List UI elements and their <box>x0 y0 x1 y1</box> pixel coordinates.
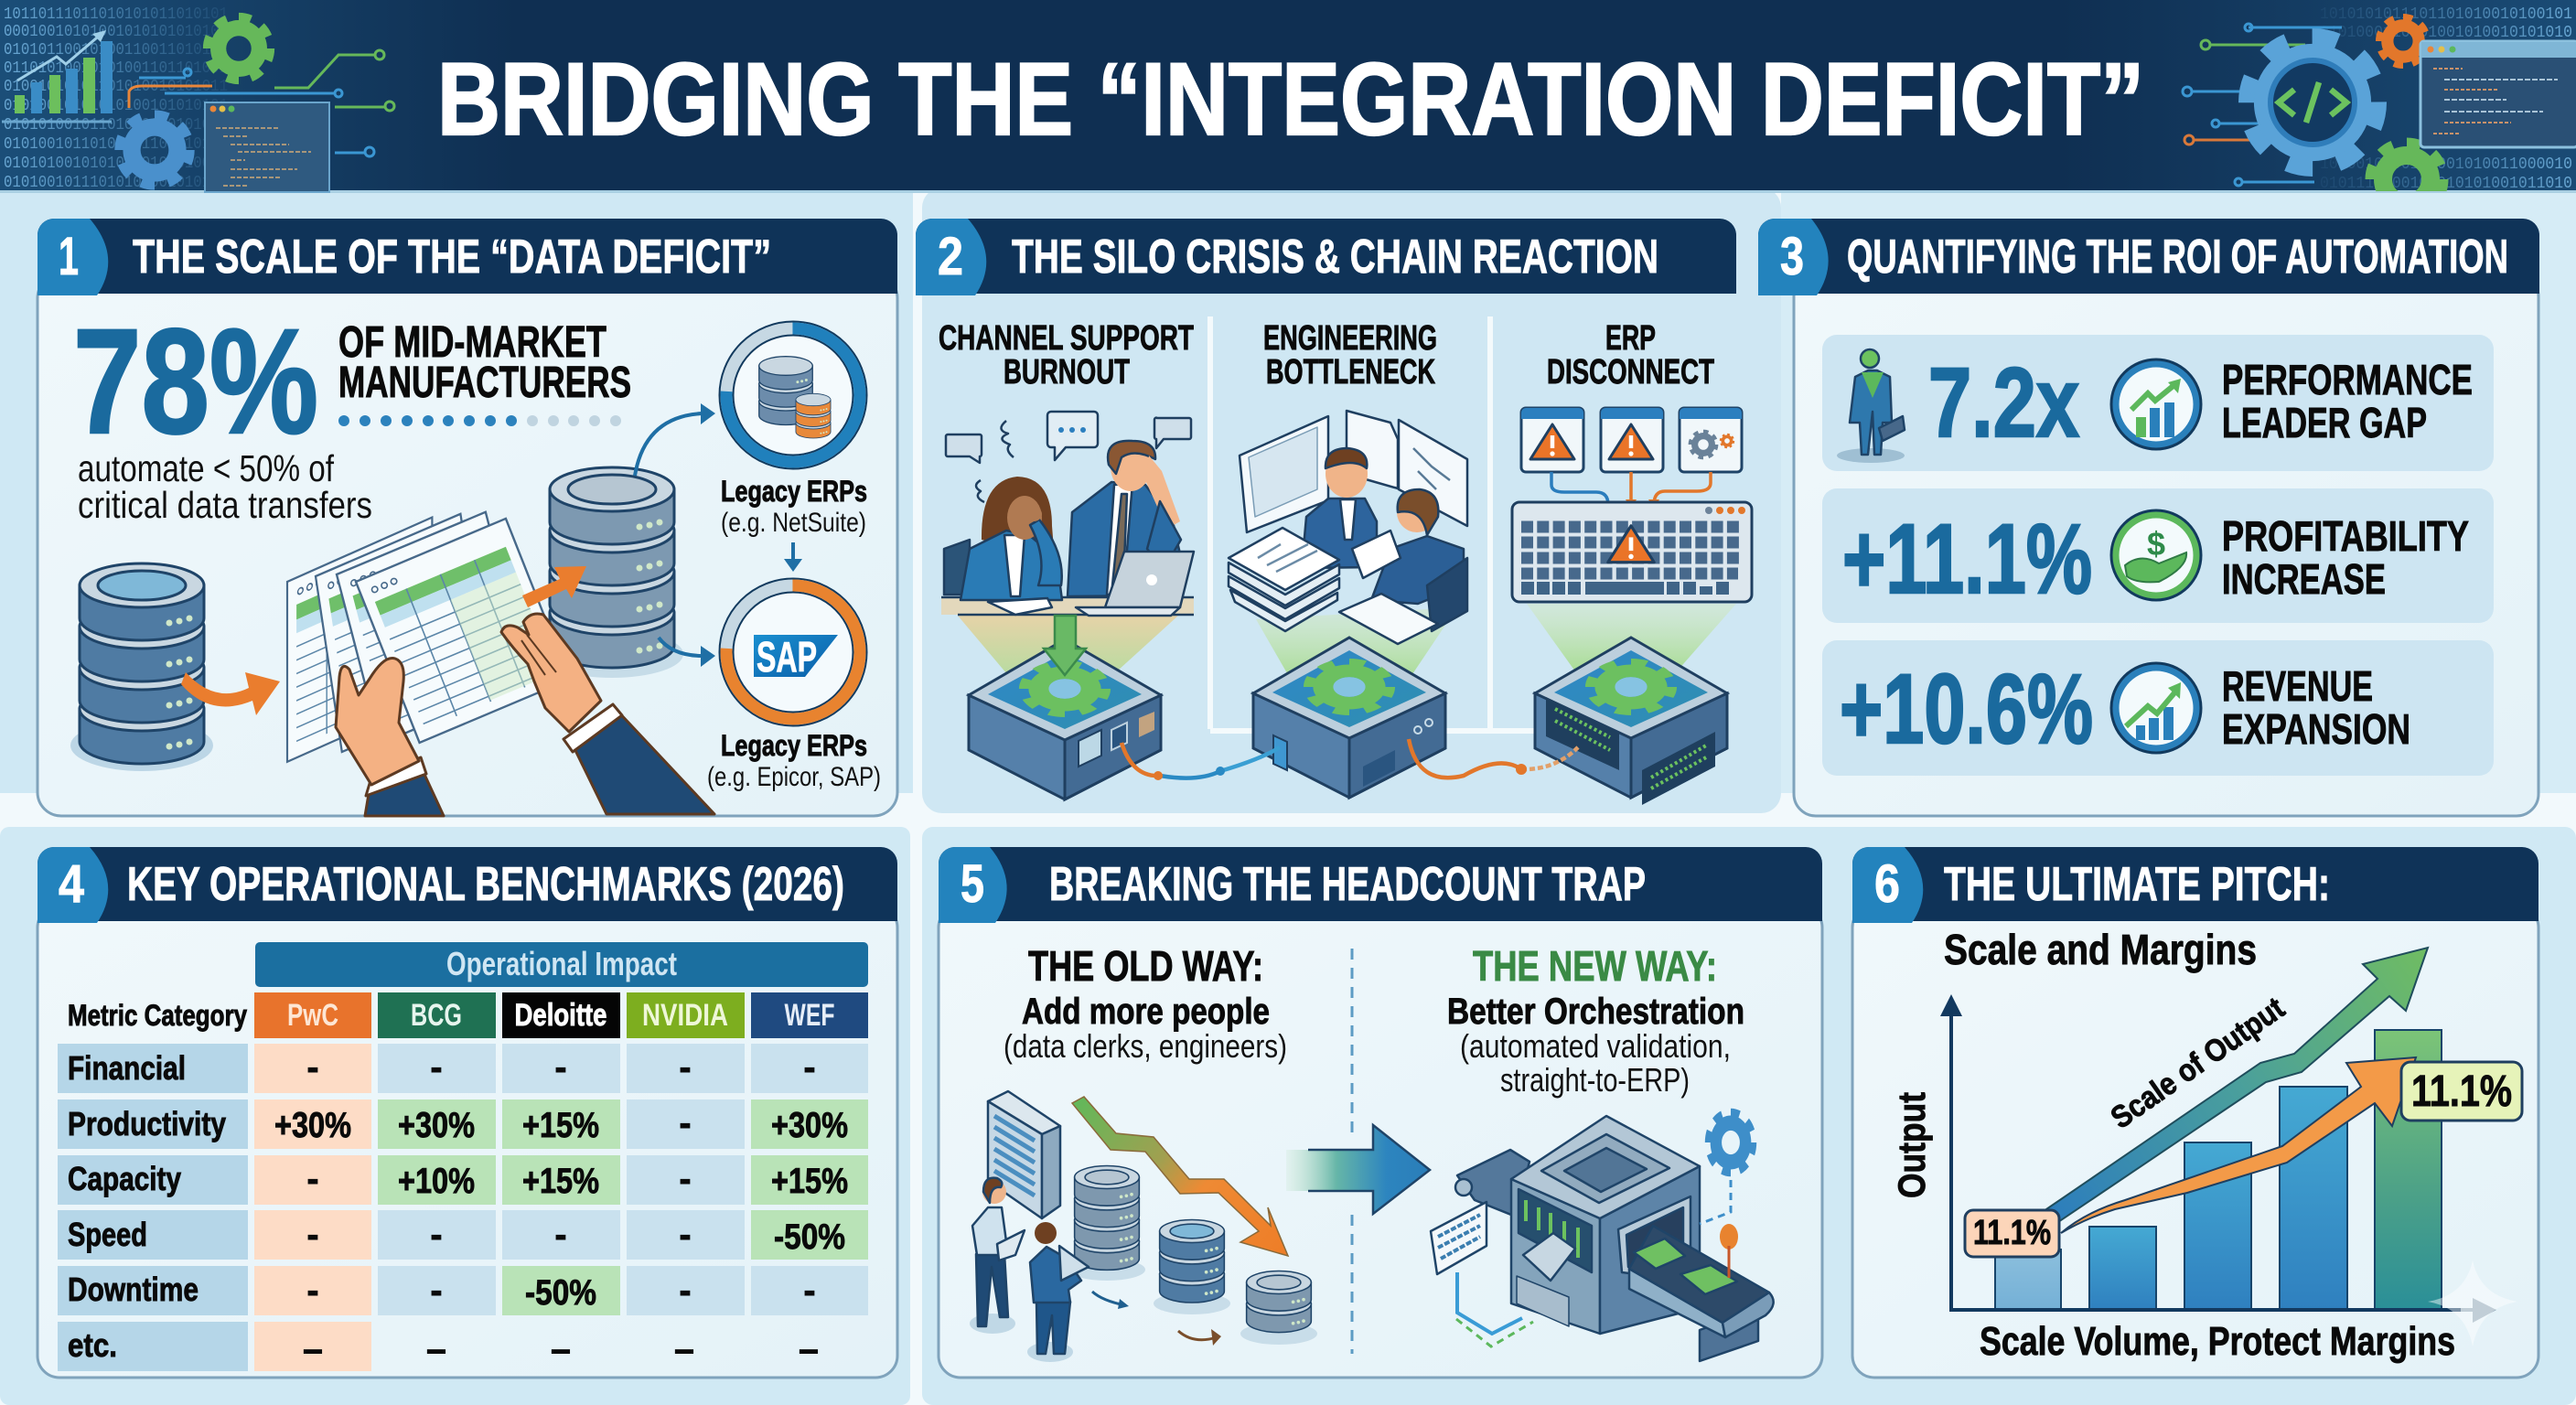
dot scale <box>338 415 621 426</box>
table values: - <box>430 1271 443 1311</box>
panel 5 heading: 5 <box>961 854 984 914</box>
stat: 7.2x: 7.2x <box>1928 347 2079 457</box>
table values: +30% <box>398 1106 475 1145</box>
arrow: chain cable <box>1122 739 1578 780</box>
chart: scale and margins <box>1890 948 2522 1364</box>
icon: money hand: $ <box>2147 525 2165 563</box>
panel 3: quantifying roi <box>1758 219 2539 816</box>
binary pattern left <box>4 5 228 192</box>
table header bar <box>255 942 868 987</box>
stat: 78%: 78% <box>73 297 318 465</box>
table values: - <box>430 1048 443 1088</box>
table values: – <box>674 1330 694 1369</box>
arrow: green push into box <box>1044 616 1086 675</box>
table column heads: NVIDIA <box>642 998 728 1033</box>
icon: big code gear <box>2250 40 2375 165</box>
icon: money hand <box>2114 513 2198 597</box>
icon: source database <box>70 563 213 771</box>
panel 5 heading: BREAKING THE HEADCOUNT TRAP <box>1049 858 1646 911</box>
table column heads: BCG <box>411 998 462 1033</box>
arrow: db to spreadsheets <box>181 672 280 715</box>
icon: server box 3 <box>1535 638 1727 805</box>
arrow: declining zigzag <box>1072 1097 1288 1256</box>
table values: +30% <box>771 1106 848 1145</box>
text: of mid-market manufacturers: MANUFACTURERS <box>338 359 631 407</box>
icon: code window left <box>205 102 329 192</box>
panel 2 heading <box>916 219 1736 295</box>
text: of mid-market manufacturers <box>338 318 631 407</box>
row: profitability increase <box>1822 488 2494 623</box>
binary pattern left: 01101010010101001101101001 <box>4 59 228 78</box>
panel 1: the scale of the data deficit <box>38 219 897 816</box>
panel 4: benchmarks <box>38 847 897 1378</box>
panel 6 heading: THE ULTIMATE PITCH: <box>1944 858 2330 911</box>
callout: start 11.1% <box>1965 1210 2059 1257</box>
binary pattern left: 00010010101001010101010101 <box>4 23 228 41</box>
table values: - <box>430 1216 443 1255</box>
binary pattern right <box>2320 5 2572 193</box>
arrow: feedback loop <box>1456 1272 1533 1346</box>
table row backgrounds <box>58 1044 868 1371</box>
table values: -50% <box>774 1217 845 1257</box>
table values: - <box>803 1271 816 1311</box>
panel 4 heading: 4 <box>59 854 84 914</box>
stat: +11.1%: +11.1% <box>1842 503 2092 614</box>
text: the new way: straight-to-ERP) <box>1500 1061 1690 1099</box>
table column heads <box>254 992 868 1038</box>
text: the old way <box>1004 942 1287 1065</box>
panel 3 heading: 3 <box>1780 227 1804 286</box>
table values: - <box>554 1048 567 1088</box>
label: legacy erps netsuite: (e.g. NetSuite) <box>721 508 866 538</box>
table values: - <box>307 1160 318 1199</box>
arrow: db to netsuite <box>635 403 715 476</box>
label: legacy erps sap: (e.g. Epicor, SAP) <box>707 762 881 792</box>
text: the old way: (data clerks, engineers) <box>1004 1027 1287 1065</box>
label: revenue expansion <box>2222 662 2410 753</box>
icon: circuit lines right <box>2183 24 2342 186</box>
table values: - <box>307 1048 318 1088</box>
icon: circuit lines left <box>129 50 394 156</box>
icon: code window right <box>2420 41 2576 147</box>
label: metric category: Metric Category <box>68 999 247 1032</box>
label: profitability increase: INCREASE <box>2222 555 2386 603</box>
table values: +15% <box>771 1162 848 1201</box>
table values: - <box>554 1216 567 1255</box>
table values: - <box>307 1216 318 1255</box>
subtitle: scale and margins: Scale and Margins <box>1944 926 2257 973</box>
woman <box>982 477 1054 549</box>
icon: sap ring <box>726 585 860 719</box>
icon: blue gear and pin <box>1700 1114 1753 1278</box>
arrow: spreadsheets to db <box>522 566 586 607</box>
icon: workers <box>970 1178 1089 1362</box>
label: profitability increase <box>2222 512 2469 603</box>
label: scale of output: Scale of Output <box>2105 991 2291 1136</box>
keyboard <box>1512 502 1752 602</box>
icon: target database <box>541 467 683 678</box>
table values: - <box>307 1271 318 1311</box>
icon: leader person <box>1837 349 1905 463</box>
icon: growth chart <box>2114 362 2198 446</box>
label: engineering bottleneck: ENGINEERING <box>1263 319 1437 358</box>
row labels: Financial <box>68 1049 186 1087</box>
row labels: Productivity <box>68 1105 226 1142</box>
label: performance leader gap: PERFORMANCE <box>2222 356 2473 403</box>
arrow: old to new <box>1286 1125 1430 1214</box>
icon: sparkle <box>2428 1260 2517 1346</box>
table values: - <box>679 1104 692 1143</box>
table values: - <box>679 1160 692 1199</box>
panel 1 heading <box>38 219 897 295</box>
label: performance leader gap: LEADER GAP <box>2222 399 2427 446</box>
binary pattern left: 10110111011010101011010101 <box>4 5 228 24</box>
row labels: Capacity <box>68 1160 181 1197</box>
row labels: Downtime <box>68 1271 199 1308</box>
icon: orange gear <box>2380 18 2426 64</box>
binary pattern left: 01010010110101001101010101 <box>4 135 228 154</box>
binary pattern left: 01010010111010101001010101 <box>4 174 228 192</box>
arrow: scale of output <box>2046 948 2428 1222</box>
table values: – <box>551 1330 571 1369</box>
label: channel support burnout: CHANNEL SUPPORT <box>939 319 1194 358</box>
table values <box>274 1048 848 1369</box>
axes <box>1940 994 2496 1323</box>
axis label: scale volume: Scale Volume, Protect Margins <box>1980 1319 2455 1364</box>
label: legacy erps sap <box>707 729 881 792</box>
callout: start 11.1%: 11.1% <box>1973 1214 2051 1252</box>
arrow: margins <box>2061 1057 2416 1233</box>
label: revenue expansion: EXPANSION <box>2222 705 2410 753</box>
row labels <box>68 1049 226 1364</box>
text: the new way: (automated validation, <box>1460 1027 1731 1065</box>
table values: - <box>679 1271 692 1311</box>
header banner <box>0 0 2576 214</box>
table: benchmarks <box>58 942 868 1371</box>
panel 6 heading <box>1852 847 2538 923</box>
table values: +15% <box>522 1106 599 1145</box>
icon: server box 1 <box>969 639 1161 799</box>
label: profitability increase: PROFITABILITY <box>2222 512 2469 560</box>
bubbles <box>1047 412 1098 460</box>
label: legacy erps netsuite <box>721 475 867 538</box>
row: performance leader gap <box>1822 335 2494 471</box>
icon: hands <box>336 614 714 816</box>
panel 5: headcount trap <box>939 847 1822 1378</box>
stat: +10.6%: +10.6% <box>1840 653 2093 764</box>
panel 2 heading: 2 <box>938 227 963 286</box>
icon: blue gear <box>122 117 188 183</box>
binary pattern left: 01010100101010100101010010 <box>4 155 228 173</box>
bars <box>1995 1030 2442 1310</box>
icon: old way databases <box>1068 1166 1317 1345</box>
table values: – <box>303 1330 323 1369</box>
text: automate: critical data transfers <box>78 484 372 526</box>
table values: – <box>426 1330 446 1369</box>
axis label: output: Output <box>1890 1092 1933 1198</box>
label: revenue expansion: REVENUE <box>2222 662 2373 710</box>
icon: green gear <box>209 18 269 79</box>
text: automate: automate < 50% of <box>78 447 334 489</box>
icon: spreadsheets in hand <box>287 512 569 762</box>
label: erp disconnect: ERP <box>1605 319 1656 358</box>
panel 6 heading: 6 <box>1874 854 1900 914</box>
binary pattern left: 01010010101010100101010101 <box>4 97 228 115</box>
panel 1 heading: 1 <box>59 227 79 286</box>
label: channel support burnout <box>939 319 1194 391</box>
man <box>1068 482 1181 596</box>
panel 5 heading <box>939 847 1822 923</box>
scene: erp disconnect <box>1512 408 1752 671</box>
icon: server rack <box>988 1091 1060 1218</box>
label: erp disconnect: DISCONNECT <box>1547 353 1714 391</box>
panel 2 heading: THE SILO CRISIS & CHAIN REACTION <box>1012 231 1658 284</box>
text: automate <box>78 447 372 526</box>
scene: burnout team <box>941 412 1194 680</box>
table values: – <box>799 1330 819 1369</box>
arrow: db to sap <box>659 638 715 667</box>
callout: end 11.1%: 11.1% <box>2411 1067 2512 1116</box>
table values: +15% <box>522 1162 599 1201</box>
table values: - <box>803 1048 816 1088</box>
table values: - <box>679 1216 692 1255</box>
panel 4 heading: KEY OPERATIONAL BENCHMARKS (2026) <box>127 858 844 911</box>
text: of mid-market manufacturers: OF MID-MARKET <box>338 318 606 367</box>
icon: netsuite ring <box>726 328 860 462</box>
text: the new way: THE NEW WAY: <box>1473 942 1717 990</box>
table column heads: WEF <box>785 998 834 1033</box>
panel 3 heading <box>1758 219 2539 295</box>
panel 4 heading <box>38 847 897 923</box>
icon: bar chart <box>2 30 113 122</box>
label: engineering bottleneck: BOTTLENECK <box>1266 353 1435 391</box>
panel 6: the ultimate pitch <box>1852 847 2538 1378</box>
label: channel support burnout: BURNOUT <box>1004 353 1130 391</box>
table values: +10% <box>398 1162 475 1201</box>
table header bar: Operational Impact <box>446 945 677 982</box>
binary pattern left: 01010110010100110011010101 <box>4 41 228 59</box>
table column heads: Deloitte <box>514 998 607 1033</box>
icon: green gear right <box>2372 145 2442 214</box>
laptop <box>1105 552 1194 607</box>
text: the old way: THE OLD WAY: <box>1028 942 1263 990</box>
text: the old way: Add more people <box>1022 992 1270 1032</box>
label: legacy erps sap: Legacy ERPs <box>721 729 867 762</box>
panel 2: the silo crisis <box>916 219 1752 805</box>
panel 1 heading: THE SCALE OF THE “DATA DEFICIT” <box>133 231 771 284</box>
arrow: down <box>784 542 802 572</box>
label: erp disconnect <box>1547 319 1714 391</box>
icon: automation machine <box>1431 1116 1774 1361</box>
label: performance leader gap <box>2222 356 2473 446</box>
icon: revenue chart <box>2114 666 2198 750</box>
table values: -50% <box>525 1273 596 1313</box>
title: BRIDGING THE “INTEGRATION DEFICIT” <box>437 42 2144 156</box>
label: legacy erps netsuite: Legacy ERPs <box>721 475 867 508</box>
icon: sap ring: SAP <box>757 633 817 681</box>
row labels: etc. <box>68 1326 117 1364</box>
table values: +30% <box>274 1106 351 1145</box>
text: the new way: Better Orchestration <box>1447 992 1744 1032</box>
row labels: Speed <box>68 1216 147 1253</box>
table values: - <box>679 1048 692 1088</box>
text: the new way <box>1447 942 1744 1099</box>
row: revenue expansion <box>1822 640 2494 776</box>
scene: engineering documents <box>1229 411 1467 680</box>
table column heads: PwC <box>287 998 338 1033</box>
binary pattern left: 01010100101101010010101001 <box>4 116 228 134</box>
icon: server box 2 <box>1253 638 1445 798</box>
binary pattern left: 01001010101101010010101011 <box>4 78 228 96</box>
label: engineering bottleneck <box>1263 319 1437 391</box>
arrow: small flow <box>1092 1292 1221 1346</box>
